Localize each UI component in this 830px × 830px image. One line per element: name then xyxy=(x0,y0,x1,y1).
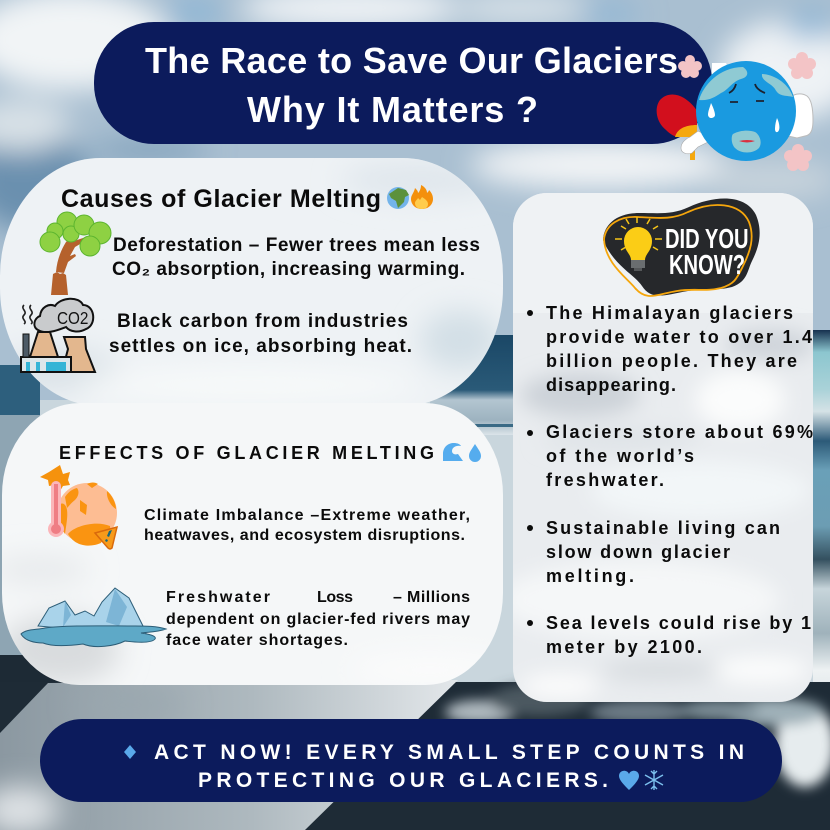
fact: himalayan glaciers: provide water to over 1.4 xyxy=(546,327,812,347)
fact: sea levels: meter by 2100. xyxy=(546,637,702,657)
icon: factory with CO2 cloud xyxy=(21,299,95,372)
text: deforestation xyxy=(112,235,480,280)
tired face xyxy=(729,84,765,102)
text: black carbon: settles on ice, absorbing heat. xyxy=(109,336,412,357)
icon: fire emoji xyxy=(411,185,433,209)
cta line two: PROTECTING OUR GLACIERS. xyxy=(198,769,608,792)
fact: himalayan glaciers: The Himalayan glaciers xyxy=(546,303,793,323)
text: climate imbalance xyxy=(144,507,470,544)
icon: hot globe with thermometer xyxy=(40,465,117,549)
cta line one: ACT NOW! EVERY SMALL STEP COUNTS IN xyxy=(154,741,744,764)
text: climate imbalance: Climate Imbalance –Extreme weather, xyxy=(144,507,470,524)
panel: effects of glacier melting xyxy=(0,403,510,685)
fact: sustainable living: melting. xyxy=(546,566,634,586)
text: freshwater loss xyxy=(166,589,470,649)
fact: freshwater store: freshwater. xyxy=(546,470,664,490)
fact: himalayan glaciers xyxy=(527,303,812,395)
text: freshwater loss: – xyxy=(393,589,402,606)
fact: freshwater store xyxy=(527,422,813,490)
fact: himalayan glaciers: billion people. They are xyxy=(546,351,797,371)
call to action banner xyxy=(40,719,782,802)
paper fan xyxy=(657,94,697,137)
text: freshwater loss: Loss xyxy=(317,589,353,606)
icon: broken tree xyxy=(40,212,111,295)
text: black carbon: Black carbon from industries xyxy=(117,311,408,332)
title banner xyxy=(94,22,712,144)
globe xyxy=(696,61,796,161)
fact: himalayan glaciers: disappearing. xyxy=(546,375,676,395)
text: freshwater loss: face water shortages. xyxy=(166,632,348,649)
title line one: The Race to Save Our Glaciers xyxy=(145,40,678,81)
heading: causes: Causes of Glacier Melting xyxy=(61,185,381,213)
towel and shoulder xyxy=(712,63,734,79)
text: climate imbalance: heatwaves, and ecosystem disruptions. xyxy=(144,527,465,544)
fact: sustainable living: slow down glacier xyxy=(546,542,730,562)
badge: did you know xyxy=(603,199,760,296)
fact: freshwater store: Glaciers store about 69% xyxy=(546,422,813,442)
text: freshwater loss: dependent on glacier-fed rivers may xyxy=(166,611,470,628)
badge: did you know: DID YOU xyxy=(665,224,749,255)
icon: factory with CO2 cloud: CO2 xyxy=(57,308,88,328)
panel: did you know facts xyxy=(500,193,815,702)
text: freshwater loss: Freshwater xyxy=(166,589,270,606)
icon: diamond xyxy=(124,745,136,759)
icon: sweating earth with fan xyxy=(657,52,816,171)
sea glimpses between the panels xyxy=(0,335,515,655)
icon: wave emoji xyxy=(443,443,463,461)
fact: sea levels: Sea levels could rise by 1 xyxy=(546,613,811,633)
text: deforestation: Deforestation – Fewer trees mean less xyxy=(113,235,480,256)
fact: sustainable living xyxy=(527,518,780,586)
icon: melting iceberg xyxy=(21,588,166,647)
fact: sustainable living: Sustainable living can xyxy=(546,518,780,538)
panel: causes of glacier melting xyxy=(0,158,503,406)
text: deforestation: CO₂ absorption, increasing warming. xyxy=(112,259,465,280)
blossom petals xyxy=(678,52,816,171)
fact: sea levels xyxy=(527,613,811,657)
title line two: Why It Matters ? xyxy=(247,89,538,130)
fact: freshwater store: of the world’s xyxy=(546,446,694,466)
icon: snowflake xyxy=(645,770,663,790)
text: freshwater loss: Millions xyxy=(407,589,470,606)
icon: globe emoji xyxy=(387,187,409,209)
heading: effects: EFFECTS OF GLACIER MELTING xyxy=(59,443,434,463)
icon: droplet emoji xyxy=(469,444,481,462)
icon: blue heart xyxy=(619,771,639,790)
text: black carbon xyxy=(109,311,412,357)
badge: did you know: KNOW? xyxy=(669,250,745,281)
